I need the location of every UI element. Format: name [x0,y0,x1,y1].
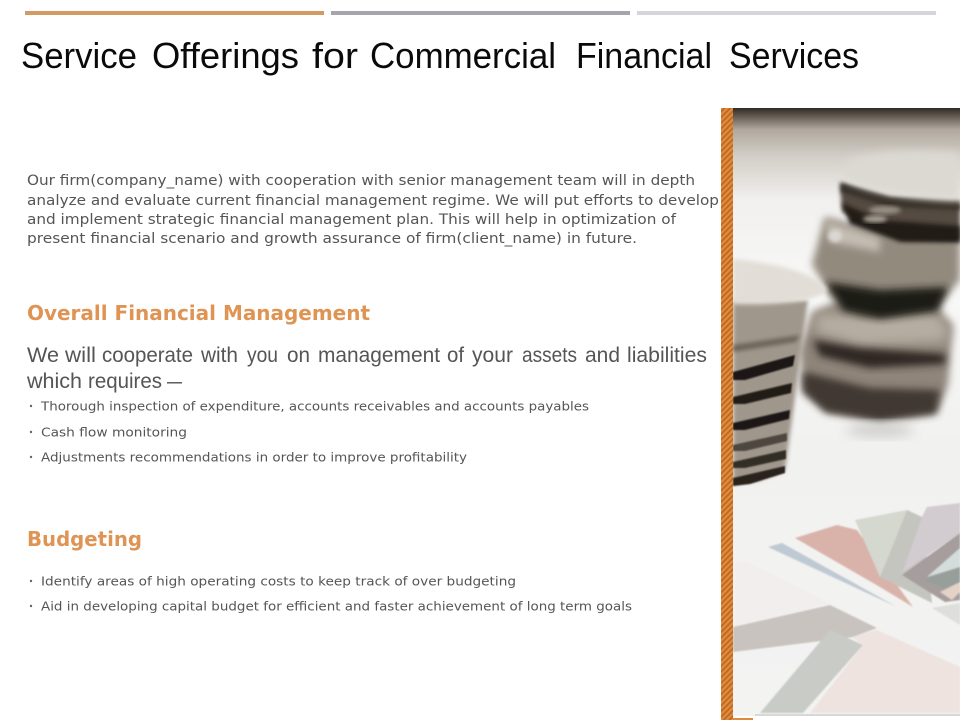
left coin stack [733,300,808,486]
intro paragraph [27,173,719,247]
bullet list: budgeting: Identify areas of high operating costs to keep track of over budgeting [41,574,516,588]
upper coin stack, right [812,151,960,319]
heading: Budgeting: Budgeting [27,527,142,551]
bullet list: financial management [30,398,589,464]
subheading text: of [447,344,464,367]
title [21,35,859,76]
bullet list: financial management: Cash flow monitoring [41,424,187,440]
title: Services [729,35,859,76]
title: Financial [576,35,712,76]
bullet list: budgeting: Aid in developing capital budget for efficient and faster achievement of long term goals [41,598,632,614]
title: for [312,35,358,76]
intro paragraph: present financial scenario and growth assurance of firm(client_name) in future. [27,231,637,247]
subheading text: with [200,344,238,367]
bullet list: financial management: Thorough inspection of expenditure, accounts receivables and accounts payables [40,398,589,414]
subheading text: assets [522,344,577,367]
hatched orange stripe [721,108,733,720]
subheading text: and [585,344,620,367]
subheading text: requires [88,370,162,393]
heading: Overall Financial Management: Overall Financial Management [27,301,370,325]
paper chart: fan wedges [768,543,897,607]
lower coin stack, right [800,300,953,437]
top accent bars [25,11,936,15]
title: Service [21,35,137,76]
title: Commercial [370,35,556,76]
subheading text [26,344,707,393]
subheading text: will [64,344,96,367]
paper chart: lower left shapes [733,503,960,713]
bullet list: budgeting [30,574,632,614]
subheading text: cooperate [102,344,193,367]
left coin face [733,259,827,304]
intro paragraph: Our firm(company_name) with cooperation with senior management team will in depth [27,173,695,189]
bullet list: financial management: Adjustments recommendations in order to improve profitability [41,450,468,464]
subheading text: We [27,344,59,367]
title: Offerings [152,35,299,76]
photo: coins and charts [733,108,960,720]
intro paragraph: analyze and evaluate current financial management regime. We will put efforts to develop [27,193,719,209]
subheading text: you [247,344,278,367]
subheading text: which [26,370,82,393]
subheading text: management [318,344,440,367]
intro paragraph: and implement strategic financial management plan. This will help in optimization of [27,212,677,228]
subheading text: liabilities [627,344,707,367]
subheading text: – [167,370,182,393]
subheading text: on [287,344,310,367]
subheading text: your [472,344,513,367]
